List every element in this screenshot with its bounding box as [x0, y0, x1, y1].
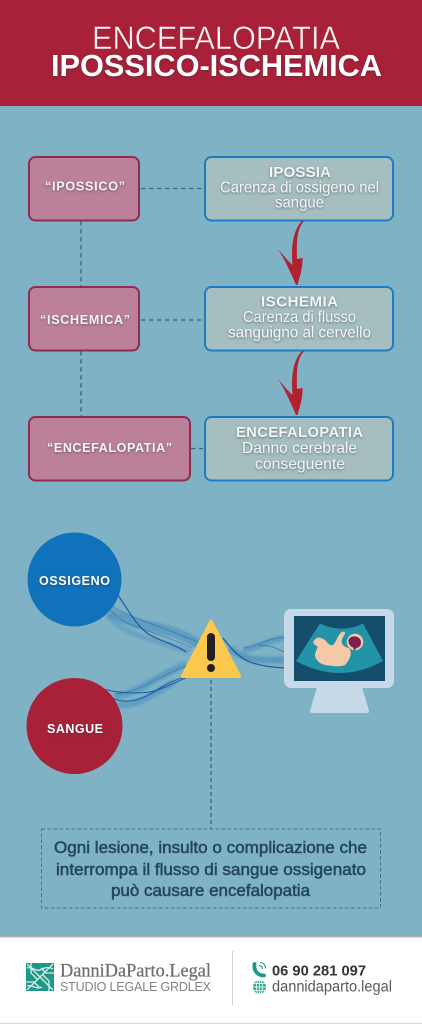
definition box: encefalopatia: Danno cerebrale — [242, 440, 357, 457]
definition box: ischemia: ISCHEMIA — [261, 294, 338, 310]
definition box: ischemia — [205, 287, 393, 350]
term box: ischemica: “ISCHEMICA” — [40, 313, 130, 327]
circle: ossigeno — [28, 532, 122, 626]
arrow: ipossia to ischemia — [278, 221, 304, 285]
note box — [42, 829, 380, 908]
term box: ischemica — [29, 287, 139, 350]
note box: Ogni lesione, insulto o complicazione che — [54, 839, 367, 857]
website: dannidaparto.legal — [272, 978, 392, 996]
fetal brain — [348, 636, 361, 650]
title line 2: IPOSSICO-ISCHEMICA — [51, 49, 382, 83]
title line 1: ENCEFALOPATIA — [92, 20, 341, 56]
dashed connector: alert to note — [210, 680, 212, 829]
logo mark — [26, 963, 54, 991]
note box: può causare encefalopatia — [111, 882, 311, 900]
logo tagline: STUDIO LEGALE GRDLEX — [60, 980, 212, 994]
circle: sangue: SANGUE — [47, 722, 103, 736]
term box: encefalopatia — [29, 417, 190, 480]
icon: globe — [252, 980, 266, 994]
monitor frame — [284, 609, 394, 688]
flowing streams: sangue to alert — [100, 664, 186, 705]
definition box: encefalopatia: ENCEFALOPATIA — [236, 425, 364, 441]
icon: phone — [254, 962, 266, 976]
logo wordmark: DanniDaParto.Legal — [60, 962, 211, 982]
monitor stand — [310, 687, 369, 713]
definition box: ischemia: sanguigno al cervello — [228, 324, 371, 342]
term box: ipossico: “IPOSSICO” — [45, 180, 125, 194]
ultrasound fan — [296, 624, 383, 673]
circle: sangue — [26, 678, 122, 774]
definition box: ischemia: Carenza di flusso — [243, 309, 356, 326]
arrow: ischemia to encefalopatia — [278, 351, 304, 415]
dashed connectors in the diagram — [81, 188, 204, 448]
term box: encefalopatia: “ENCEFALOPATIA” — [47, 441, 172, 455]
definition box: ipossia: sangue — [275, 194, 324, 212]
footer — [0, 936, 422, 1024]
icon: ultrasound monitor — [284, 609, 394, 713]
fetus body — [313, 632, 351, 666]
definition box: encefalopatia: conseguente — [255, 456, 345, 473]
definition box: ipossia: IPOSSIA — [269, 164, 331, 181]
flowing streams: ossigeno to alert — [107, 595, 200, 652]
note box: interrompa il flusso di sangue ossigenato — [56, 861, 366, 879]
monitor screen — [294, 616, 385, 681]
phone number: 06 90 281 097 — [272, 962, 366, 980]
definition box: ipossia: Carenza di ossigeno nel — [220, 180, 379, 196]
icon: warning triangle — [183, 622, 239, 676]
definition box: ipossia — [205, 157, 393, 220]
header banner with title — [0, 0, 422, 106]
fetal head outline — [347, 634, 363, 650]
term box: ipossico — [29, 157, 139, 220]
definition box: encefalopatia — [205, 417, 393, 480]
flowing streams: alert to monitor — [223, 637, 284, 668]
circle: ossigeno: OSSIGENO — [39, 574, 110, 588]
